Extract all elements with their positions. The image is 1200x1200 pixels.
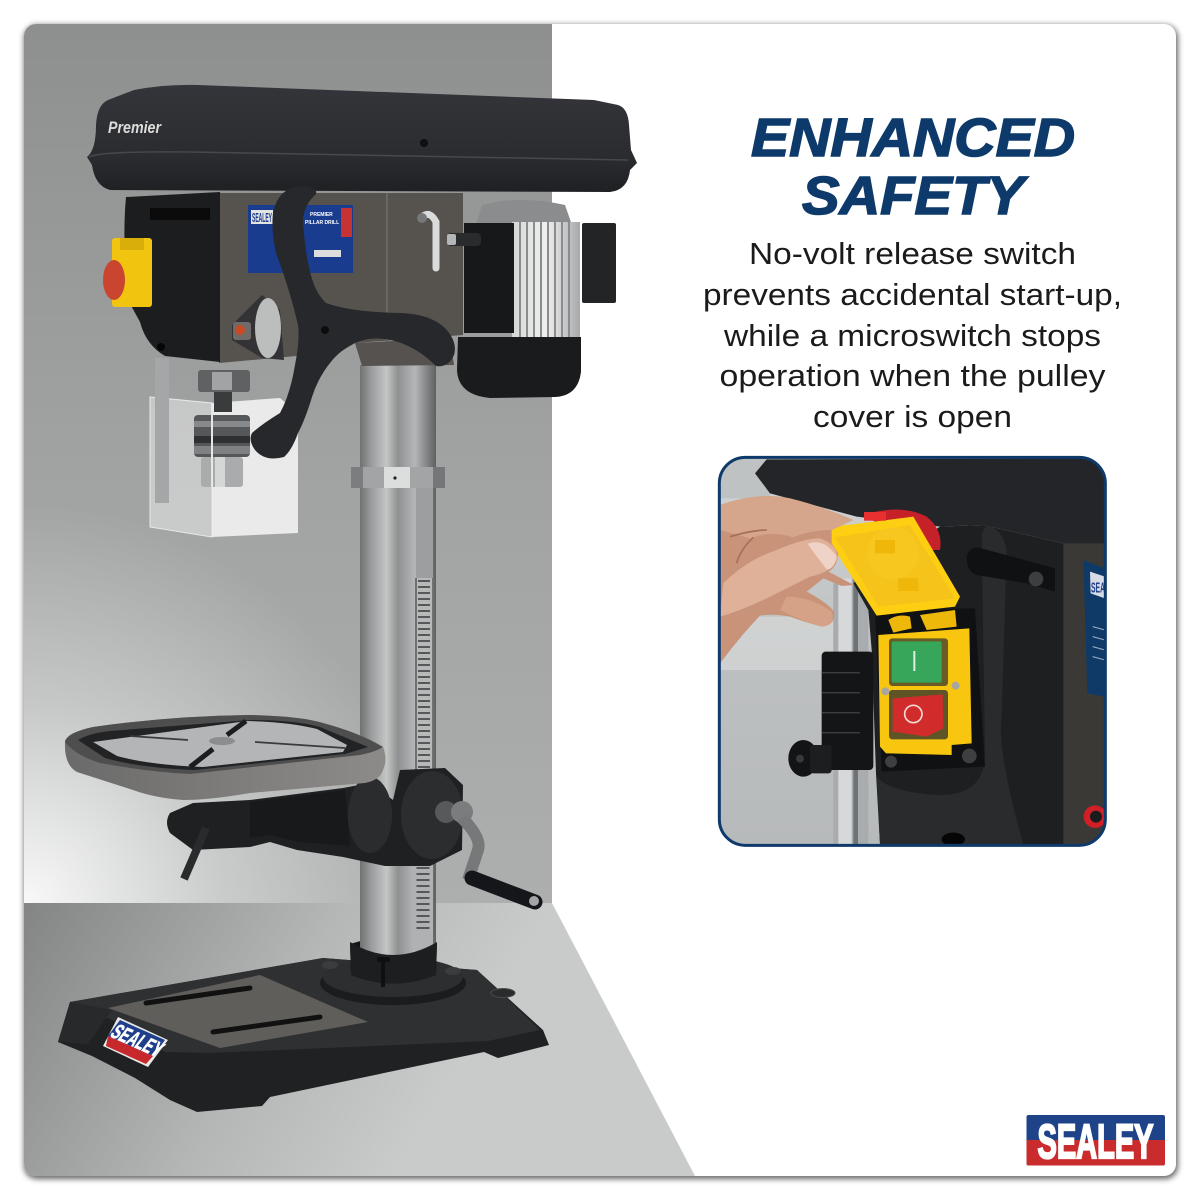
Premier badge: Premier <box>108 118 162 137</box>
description text: while a microswitch stops <box>723 318 1101 353</box>
description text: cover is open <box>813 399 1012 434</box>
specification label: SEALEY <box>252 210 272 225</box>
column rods <box>833 578 868 845</box>
drill press <box>58 85 637 1112</box>
red lock detail <box>1084 805 1106 828</box>
specification label: PREMIER <box>310 212 333 218</box>
green start button <box>889 638 948 686</box>
chrome lever <box>417 213 436 268</box>
head casting <box>219 193 463 366</box>
table clamp lever <box>184 828 206 879</box>
depth collar <box>351 467 445 488</box>
SEALEY decal on base <box>103 1017 169 1067</box>
table arm <box>167 768 463 866</box>
inset photo: switch cover opened by hand <box>719 457 1106 846</box>
drill table <box>65 715 385 800</box>
machine body <box>853 525 1064 844</box>
head housing left <box>124 192 220 362</box>
black clamp stack <box>788 652 873 777</box>
heading <box>751 108 1075 226</box>
hand <box>720 496 854 663</box>
background: grey studio wall and floor <box>24 24 695 1176</box>
specification label <box>248 205 353 273</box>
column socket flange <box>320 937 515 1005</box>
heading: ENHANCED <box>751 108 1075 168</box>
clear chuck guard <box>150 397 298 537</box>
no-volt switch <box>103 238 152 307</box>
yellow switch housing <box>878 610 972 755</box>
rack teeth <box>413 488 433 950</box>
steel plate with slots <box>108 975 368 1048</box>
housing hole <box>157 343 165 351</box>
SEALEY decal on base: SEALEY <box>106 1020 169 1061</box>
description text <box>703 236 1122 434</box>
spindle <box>198 370 250 412</box>
specification label: PILLAR DRILL <box>305 220 339 226</box>
side lock bracket <box>967 548 1055 592</box>
photo border <box>719 457 1105 845</box>
feed handle <box>251 186 455 458</box>
description text: operation when the pulley <box>720 358 1106 393</box>
drill base <box>58 937 549 1112</box>
slot on housing <box>150 208 210 220</box>
socket front wall <box>350 942 437 987</box>
inset photo: switch cover opened by hand: SEA <box>1091 581 1105 597</box>
red stop button <box>889 690 948 739</box>
head cover <box>87 85 637 192</box>
mounting plate <box>875 608 985 772</box>
motor <box>447 200 616 398</box>
rating label <box>1083 560 1105 697</box>
depth dial <box>232 295 284 360</box>
crank handle <box>451 801 539 906</box>
column <box>360 365 436 955</box>
heading: SAFETY <box>802 166 1029 226</box>
chuck <box>194 403 250 487</box>
open yellow lid <box>828 512 960 616</box>
description text: No-volt release switch <box>749 236 1076 271</box>
red emergency button <box>863 510 941 550</box>
description text: prevents accidental start-up, <box>703 277 1122 312</box>
chuck guard rod <box>155 358 169 503</box>
machine head cover <box>755 458 1104 544</box>
